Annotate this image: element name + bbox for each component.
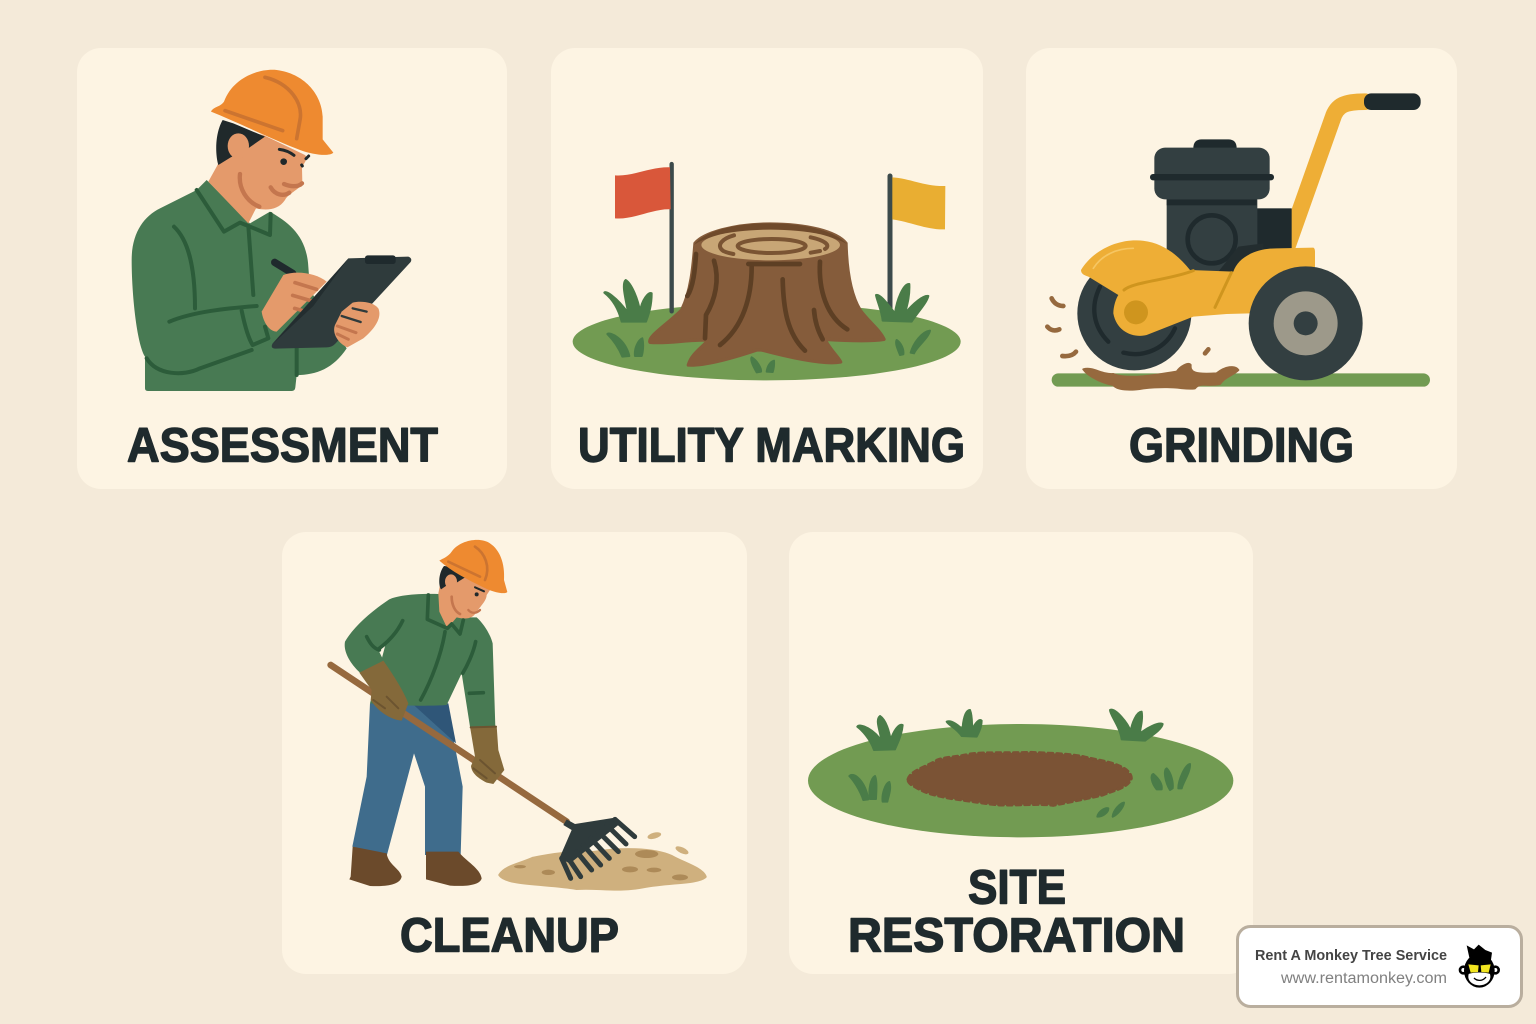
panel: cleanup: [282, 532, 747, 974]
text: website: www.rentamonkey.com: [1280, 970, 1447, 987]
icon: stump with utility flags: [573, 164, 961, 380]
heading: grinding: GRINDING: [1129, 420, 1354, 473]
heading: site restoration: RESTORATION: [848, 910, 1185, 963]
rake head: [559, 817, 635, 878]
text: company name: Rent A Monkey Tree Service: [1255, 948, 1447, 964]
icon: worker raking debris: [331, 540, 705, 889]
heading: assessment: ASSESSMENT: [127, 420, 438, 473]
panel: assessment: [77, 48, 507, 489]
heading: cleanup: CLEANUP: [400, 910, 619, 963]
icon: monkey logo: [1459, 945, 1500, 988]
icon: restored ground patch: [808, 710, 1233, 837]
panel: utility marking: [551, 48, 983, 489]
panel: grinding: [1026, 48, 1457, 489]
badge: rent a monkey branding: [1238, 926, 1522, 1006]
heading: utility marking: UTILITY MARKING: [578, 420, 965, 473]
icon: stump grinder machine: [1047, 93, 1430, 390]
heading: site restoration: [848, 862, 1185, 963]
panel: site restoration: [789, 532, 1253, 974]
heading: site restoration: SITE: [968, 862, 1066, 915]
icon: inspector with clipboard: [132, 70, 411, 391]
